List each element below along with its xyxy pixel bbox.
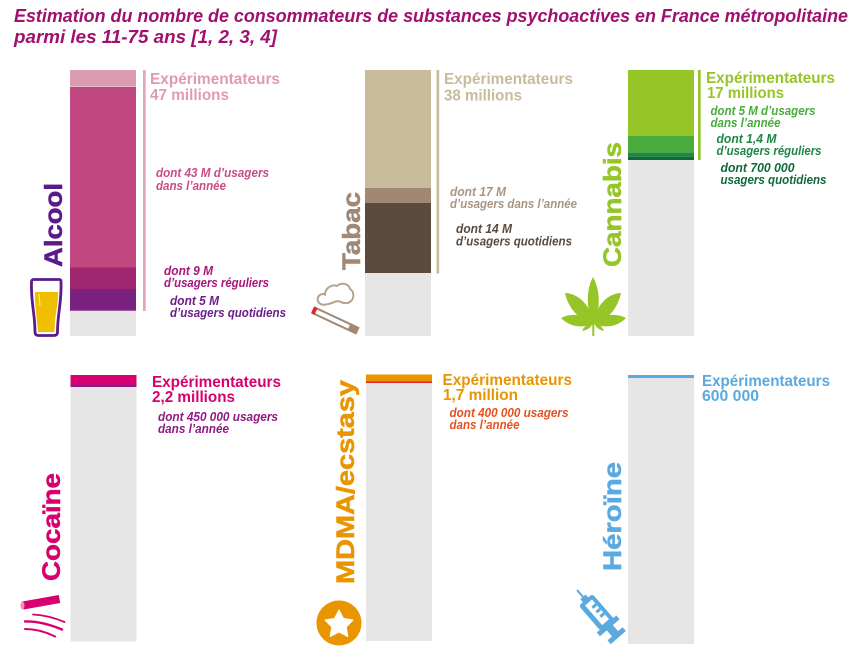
label: usagers réguliers cannabis: dont 1,4 M — [716, 131, 778, 146]
substance name: mdma: MDMA/ecstasy — [332, 380, 360, 584]
label: experimentateurs cocaïne: 2,2 millions — [152, 389, 235, 406]
label: usagers quotidiens tabac: d’usagers quotidiens — [456, 234, 572, 248]
icon: syringe — [567, 581, 628, 646]
label: usagers dans l'année tabac — [450, 184, 577, 211]
label: experimentateurs mdma — [442, 372, 572, 404]
stacked bar: cannabis — [628, 70, 694, 336]
label: usagers dans l'année tabac: dont 17 M — [450, 184, 507, 199]
label: experimentateurs alcool: Expérimentateurs — [150, 71, 280, 88]
icon: cocaine straw and lines — [20, 599, 64, 636]
panel: cannabis — [561, 70, 835, 336]
label: usagers quotidiens tabac — [456, 221, 572, 248]
label: experimentateurs cocaïne: Expérimentateurs — [152, 374, 281, 391]
panel: mdma — [316, 372, 572, 646]
substance name: tabac: Tabac — [338, 192, 366, 270]
icon: ecstasy pill with star — [316, 600, 362, 646]
label: usagers quotidiens cannabis: dont 700 000 — [720, 160, 795, 175]
stacked bar: alcool — [70, 70, 136, 336]
label: experimentateurs tabac: 38 millions — [444, 88, 522, 104]
label: usagers dans l'année mdma: dont 400 000 usagers — [450, 405, 568, 420]
label: usagers dans l'année cannabis: dans l’année — [710, 115, 780, 130]
label: usagers dans l'année cannabis — [710, 103, 816, 130]
label: usagers réguliers alcool: d’usagers réguliers — [164, 275, 269, 290]
label: experimentateurs tabac: Expérimentateurs — [444, 71, 573, 88]
label: usagers dans l'année tabac: d’usagers dans l’année — [450, 196, 577, 211]
label: usagers quotidiens cannabis — [720, 160, 826, 187]
stacked bar: cocaïne — [70, 375, 136, 642]
substance name: cocaïne: Cocaïne — [38, 473, 66, 581]
icon: cigarette and smoke — [312, 284, 358, 331]
title — [13, 6, 848, 47]
panel: tabac — [312, 70, 577, 336]
panel: alcool — [31, 70, 286, 336]
label: experimentateurs alcool — [150, 71, 280, 104]
label: usagers dans l'année alcool: dans l’année — [156, 178, 226, 193]
label: usagers dans l'année mdma: dans l’année — [450, 417, 520, 432]
icon: cannabis leaf — [561, 277, 626, 336]
label: experimentateurs mdma: 1,7 million — [443, 387, 518, 404]
label: experimentateurs héroïne: 600 000 — [702, 388, 759, 405]
icon: beer glass — [31, 280, 61, 336]
label: usagers dans l'année cocaïne — [158, 409, 278, 436]
label: usagers réguliers alcool: dont 9 M — [164, 263, 214, 278]
label: experimentateurs tabac — [444, 71, 573, 104]
label: usagers dans l'année alcool: dont 43 M d’usagers — [156, 165, 269, 180]
label: experimentateurs cannabis: 17 millions — [707, 85, 784, 102]
label: usagers quotidiens alcool: dont 5 M — [170, 293, 220, 308]
label: usagers dans l'année cannabis: dont 5 M d’usagers — [710, 103, 816, 118]
label: usagers dans l'année cocaïne: dans l’année — [158, 421, 229, 436]
label: usagers quotidiens cannabis: usagers quotidiens — [720, 172, 826, 187]
label: usagers quotidiens alcool — [170, 293, 286, 320]
substance name: cannabis: Cannabis — [599, 142, 627, 267]
title: parmi les 11-75 ans [1, 2, 3, 4] — [13, 27, 278, 47]
substance name: alcool: Alcool — [40, 183, 68, 267]
label: usagers dans l'année cocaïne: dont 450 000 usagers — [158, 409, 278, 424]
label: usagers réguliers cannabis: d’usagers réguliers — [716, 143, 822, 158]
panel: héroïne — [567, 373, 830, 646]
label: experimentateurs cocaïne — [152, 374, 281, 406]
label: experimentateurs cannabis: Expérimentateurs — [706, 70, 835, 87]
label: experimentateurs mdma: Expérimentateurs — [442, 372, 572, 389]
panel: cocaïne — [20, 374, 281, 642]
label: experimentateurs héroïne: Expérimentateurs — [702, 373, 830, 390]
label: experimentateurs héroïne — [702, 373, 830, 405]
stacked bar: héroïne — [628, 375, 694, 644]
stacked bar: mdma — [366, 374, 432, 641]
label: usagers quotidiens tabac: dont 14 M — [456, 221, 513, 236]
label: usagers dans l'année alcool — [156, 165, 269, 193]
label: experimentateurs cannabis — [706, 70, 835, 102]
label: usagers réguliers cannabis — [716, 131, 822, 158]
title: Estimation du nombre de consommateurs de substances psychoactives en France métropolitaine — [14, 6, 848, 26]
substance name: héroïne: Héroïne — [599, 462, 627, 571]
label: usagers dans l'année mdma — [450, 405, 568, 432]
label: usagers quotidiens alcool: d’usagers quotidiens — [170, 305, 286, 320]
label: experimentateurs alcool: 47 millions — [150, 87, 229, 104]
stacked bar: tabac — [365, 70, 431, 336]
label: usagers réguliers alcool — [164, 263, 269, 290]
